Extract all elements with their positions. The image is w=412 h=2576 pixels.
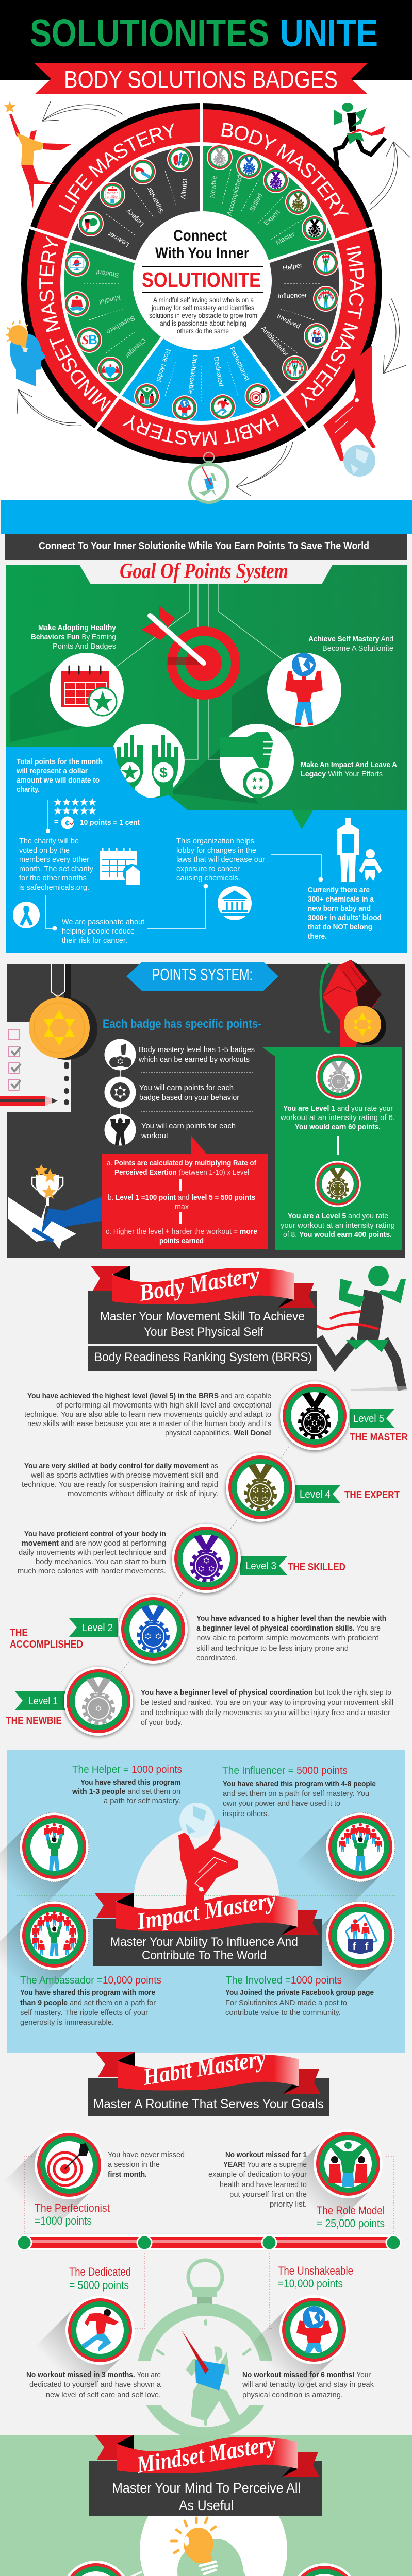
icon: target <box>141 605 240 700</box>
text: role model: example of dedication to your <box>208 2171 307 2179</box>
icon: head and lightbulb <box>140 2477 287 2576</box>
wheel badge labels: Learner <box>106 230 130 249</box>
wheel badge labels: Mindful <box>98 294 121 307</box>
wheel badge labels <box>95 174 307 394</box>
text: total points: amount we will donate to <box>17 776 100 785</box>
arrow: impact to habit <box>383 298 406 374</box>
level 3: movement and are now good at performing <box>22 1539 166 1548</box>
badge: influencer <box>295 1812 395 1912</box>
wheel centre: Connect <box>173 227 227 244</box>
callout: points calculation: Perceived Exertion (between 1-10) x Level <box>114 1168 249 1177</box>
text: dedicated <box>69 2265 131 2292</box>
top white backdrop <box>0 80 412 500</box>
heading: body mastery: Body Readiness Ranking System (BRRS) <box>94 1350 312 1364</box>
text: charity voting: voted on by the <box>19 846 70 855</box>
panel: level examples: You would earn 60 points. <box>295 1123 381 1131</box>
callout: points calculation: c. Higher the level + harder the workout = more <box>106 1227 257 1236</box>
level 4 <box>22 1453 400 1523</box>
level 3 <box>18 1524 345 1595</box>
wheel badge labels: Newbie <box>208 175 218 198</box>
text: influencer <box>222 1765 376 1818</box>
sector: mindset <box>64 241 202 395</box>
panel tab heading: Goal Of Points System <box>120 560 288 583</box>
text: chemicals: 3000+ in adults' blood <box>308 913 382 922</box>
text: perfectionist: The Perfectionist <box>35 2201 110 2214</box>
text: unshakeable body <box>242 2371 374 2399</box>
icon: fist with medal <box>321 960 386 1047</box>
icon: hands star and dollar: $ <box>159 765 168 781</box>
wheel centre <box>133 211 272 350</box>
text: goal 1: Points And Badges <box>53 642 116 651</box>
icon: star reaching figure <box>4 101 71 209</box>
wheel badge labels: Perfectionist <box>228 346 252 382</box>
callout: points calculation: max <box>175 1202 189 1211</box>
text: unshakeable body: will and tenacity to get and stay in peak <box>242 2381 374 2389</box>
text: role model: = 25,000 points <box>317 2217 385 2230</box>
band: tagline <box>5 534 407 560</box>
text: organization: exposure to cancer <box>176 865 240 873</box>
text: total points: charity. <box>17 785 40 794</box>
badge: perfectionist <box>4 2130 104 2230</box>
wheel centre: A mindful self loving soul who is on a <box>153 296 254 304</box>
heading: habit mastery: Habit Mastery <box>141 2045 268 2090</box>
text: passionate: their risk for cancer. <box>62 936 127 945</box>
item: points per badge: badge based on your behavior <box>139 1093 239 1102</box>
heading hexagon <box>126 962 278 991</box>
text: goal 1: Make Adopting Healthy <box>38 623 117 632</box>
icon: gold medal <box>29 964 97 1060</box>
text: ambassador: than 9 people and set them on a path for <box>20 1999 156 2007</box>
band: blue <box>1 500 412 534</box>
text: dedicated body: No workout missed in 3 months. You are <box>26 2371 161 2379</box>
text: involved: The Involved =1000 points <box>226 1975 342 1986</box>
badge: role model <box>283 2129 383 2229</box>
text: role model <box>208 2151 385 2230</box>
wheel badge labels: Helper <box>282 261 303 272</box>
level 1: THE NEWBIE <box>6 1715 62 1726</box>
item: points per badge: You will earn points for each <box>139 1083 234 1092</box>
wheel centre: With You Inner <box>155 245 249 262</box>
heading: mindset mastery: As Useful <box>179 2498 234 2513</box>
text: goal 3: Make An Impact And Leave A <box>301 760 397 769</box>
text: dedicated body: dedicated to yourself and have shown a <box>29 2381 161 2389</box>
icon: big runner <box>305 1266 407 1391</box>
level 3: daily movements with perfect technique and <box>19 1549 166 1557</box>
text: dedicated: = 5000 points <box>69 2279 129 2292</box>
level 2: ACCOMPLISHED <box>10 1639 83 1650</box>
header band <box>0 0 412 80</box>
arrow: life to body <box>42 101 123 121</box>
badge: changer <box>30 2561 130 2576</box>
icon: large stopwatch <box>129 2260 284 2433</box>
item: body mastery badges: which can be earned by workouts <box>138 1055 250 1064</box>
level 2: THE <box>10 1627 28 1638</box>
wheel badge labels: Skilled <box>248 192 264 213</box>
text: involved <box>225 1975 374 2017</box>
icon: stopwatch <box>190 452 228 502</box>
text: charity voting <box>19 837 93 892</box>
arrow: mindset to life <box>17 389 81 426</box>
panel: level examples: You are a Level 5 and you rate <box>288 1212 388 1221</box>
heading: impact mastery <box>93 1887 322 1966</box>
arrow: habit to mindset <box>236 442 293 496</box>
level 2: Level 2 <box>82 1622 113 1634</box>
heading: body mastery: Your Best Physical Self <box>144 1325 263 1339</box>
text: organization: laws that will decrease our <box>176 855 265 864</box>
badge: helper <box>0 1812 89 1912</box>
item: body mastery badges: Body mastery level has 1-5 badges <box>139 1045 255 1054</box>
wheel badge labels: Influencer <box>277 291 307 300</box>
text: involved: You Joined the private Facebook group page <box>225 1989 374 1997</box>
callout: points calculation: b. Level 1 =100 point and level 5 = 500 points <box>108 1193 255 1202</box>
panel: level examples: workout at an intensity rating of 6. <box>280 1113 395 1122</box>
wheel centre: others do the same <box>177 327 229 335</box>
panel: impact mastery <box>0 1750 405 2053</box>
level 2: a beginner level of physical coordination skills. You are <box>196 1624 381 1633</box>
level 2: skill and technique to be less injury prone and <box>196 1645 349 1653</box>
level 2: You have advanced to a higher level than the newbie with <box>196 1615 386 1623</box>
level 3: much more calories with harder movements. <box>18 1567 166 1575</box>
wheel centre: solutions in every obstacle to grow from <box>149 312 257 319</box>
text: role model: priority list. <box>270 2200 307 2209</box>
icon: globe circle backdrop <box>134 1826 279 1966</box>
icon: notepad with checks <box>0 1022 71 1112</box>
wheel centre: journey for self mastery and identifies <box>151 304 254 312</box>
text: passionate: helping people reduce <box>62 927 135 936</box>
long shadows <box>10 665 330 804</box>
level 1: Level 1 <box>28 1696 58 1707</box>
text: perfectionist <box>35 2151 185 2227</box>
icon: hand dangling medal <box>220 724 294 798</box>
points to cents <box>54 816 140 829</box>
level 3: body mechanics. You can start to burn <box>36 1558 166 1566</box>
heading: mindset mastery <box>89 2430 322 2516</box>
text: total points <box>16 757 103 794</box>
ribbon <box>91 1266 316 1308</box>
icon: stars <box>54 798 96 815</box>
wheel badge labels: Dedicated <box>212 356 225 387</box>
text: helper: with 1-3 people and set them on <box>72 1788 180 1796</box>
text: charity voting: month. The set charity <box>19 865 93 873</box>
points to cents: 10 points = 1 cent <box>80 818 140 827</box>
heading: mindset mastery: Mindset Mastery <box>135 2430 278 2478</box>
text: passionate <box>62 918 145 945</box>
item: points per workout: You will earn points for each <box>141 1122 236 1130</box>
icon: handshake and trophy <box>8 1164 102 1249</box>
heading: body mastery: Master Your Movement Skill To Achieve <box>100 1310 305 1324</box>
icon: hands star and dollar <box>110 724 185 798</box>
ring labels <box>39 123 364 446</box>
level 4: well as sports activities with precise movement skill and <box>30 1471 218 1480</box>
wheel badge labels: Ambassador <box>259 325 291 358</box>
level 5: Level 5 <box>353 1413 384 1425</box>
text: chemicals: new born baby and <box>308 904 371 913</box>
text: ambassador: You have shared this program with more <box>20 1989 155 1997</box>
level 4: technique. You are ready for suspension training and rapid <box>22 1481 218 1489</box>
level 1: You have a beginner level of physical coordination but took the right step to <box>141 1689 391 1697</box>
wheel badge labels: Accomplished <box>225 174 243 216</box>
icon: stopwatch runner <box>182 2330 242 2424</box>
text: influencer: You have shared this program with 4-8 people <box>223 1780 376 1788</box>
sector: habit <box>121 283 283 421</box>
heading: impact mastery: Contribute To The World <box>142 1948 267 1962</box>
sector: impact <box>202 241 339 395</box>
heading: habit mastery: Master A Routine That Serves Your Goals <box>93 2097 324 2111</box>
level 4: Level 4 <box>300 1489 331 1500</box>
level 5: technique. You are also able to learn new movements quickly and adapt to <box>24 1411 271 1419</box>
text: involved: contribute value to the community. <box>225 2009 341 2017</box>
item: points per workout <box>104 1114 236 1146</box>
wheel badge labels: Student <box>95 268 120 279</box>
icon: adult and baby <box>337 818 382 882</box>
item: points per workout: workout <box>141 1131 169 1140</box>
points to cents: = <box>54 818 59 826</box>
mastery wheel <box>21 103 382 464</box>
text: dedicated: The Dedicated <box>69 2265 131 2278</box>
level 4: movements without difficulty or risk of injury. <box>68 1490 218 1498</box>
level 2: coordinated. <box>196 1654 238 1663</box>
callout: points calculation <box>102 1136 268 1249</box>
badge ribbon heading: BODY SOLUTIONS BADGES <box>64 66 338 93</box>
text: charity voting: for the other months <box>19 874 87 883</box>
text: dedicated body <box>26 2371 161 2399</box>
icon: lightbulb head <box>6 320 46 386</box>
text: perfectionist: a session in the <box>108 2161 160 2169</box>
wheel badge labels: Altruist <box>179 178 189 199</box>
icon: runner at finish line <box>334 103 385 166</box>
text: goal 3 <box>301 760 397 778</box>
text: goal 2: Achieve Self Mastery And <box>308 635 393 643</box>
wheel centre: SOLUTIONITE <box>142 268 261 292</box>
text: organization: This organization helps <box>176 837 254 845</box>
text: ambassador: The Ambassador =10,000 points <box>20 1975 161 1986</box>
badge: involved <box>295 1901 395 2001</box>
level 2: now able to perform simple movements with proficient <box>196 1634 378 1642</box>
ring labels: IMPACT MASTERY <box>301 246 364 408</box>
heading: mindset mastery: Master Your Mind To Perceive All <box>112 2480 301 2496</box>
level 5: physical capabilities. Well Done! <box>165 1429 271 1437</box>
text: perfectionist: You have never missed <box>108 2151 185 2159</box>
text: goal 1: Behaviors Fun By Earning <box>31 633 116 641</box>
text: role model: No workout missed for 1 <box>225 2151 307 2159</box>
text: influencer: inspire others. <box>223 1810 269 1818</box>
panel: level examples: You are Level 1 and you rate your <box>283 1104 393 1113</box>
text: perfectionist: =1000 points <box>35 2214 92 2227</box>
level 4: You are very skilled at body control for daily movement as <box>24 1462 218 1470</box>
text: chemicals <box>308 886 382 941</box>
text: influencer: and set them on a path for self mastery. You <box>223 1790 369 1798</box>
text: organization: lobby for changes in the <box>176 846 256 855</box>
icon: hand with globe <box>178 1803 238 1917</box>
points to cents: ¢ <box>65 819 70 828</box>
text: role model: YEAR! You are a supreme <box>223 2161 307 2169</box>
icon: hand holding globe <box>323 345 376 477</box>
wheel badge labels: Unshakeable <box>187 354 200 394</box>
level 3: You have proficient control of your body in <box>24 1530 166 1538</box>
arrow: body to impact <box>369 142 410 210</box>
icon: hand dangling medal: ★★ <box>251 775 265 784</box>
level 5 <box>24 1381 408 1452</box>
wheel badge labels: Master <box>274 230 296 246</box>
text: unshakeable <box>278 2264 353 2290</box>
panel: charity <box>6 747 407 953</box>
panel: points system <box>0 960 405 1258</box>
text: goal 1 <box>31 623 117 651</box>
text: charity voting: is safechemicals.org. <box>19 883 89 892</box>
text: chemicals: that do NOT belong <box>308 923 372 931</box>
icon: hand dangling medal: ★★ <box>251 783 265 791</box>
wheel badge labels: Legacy <box>124 208 145 228</box>
text: charity voting: members every other <box>19 855 89 864</box>
level 1: and technique with daily movements so you will be injury free and a master <box>141 1709 390 1717</box>
heading: impact mastery: Master Your Ability To Influence And <box>110 1935 298 1949</box>
level 3: THE SKILLED <box>288 1562 345 1573</box>
text: unshakeable body: physical condition is amazing. <box>242 2391 343 2399</box>
badge: dedicated <box>35 2296 135 2396</box>
wheel badges <box>64 144 339 421</box>
icon: hero lifting world <box>267 653 341 727</box>
panel: goal of points system <box>6 560 407 810</box>
level 1: be tested and ranked. You are on your way to improving your movement skill <box>141 1699 393 1707</box>
level 1: of your body. <box>141 1719 183 1727</box>
text: unshakeable: =10,000 points <box>278 2277 343 2290</box>
level 5: You have achieved the highest level (level 5) in the BRRS and are capable <box>27 1392 271 1400</box>
level 1 <box>6 1667 393 1737</box>
level 5: new skills with ease because you are a master of the human body and it's <box>27 1420 271 1428</box>
panel: level examples <box>262 1047 402 1250</box>
text: influencer: The Influencer = 5000 points <box>222 1765 348 1776</box>
heading: impact mastery: Impact Mastery <box>135 1887 278 1935</box>
icon: calendar badge <box>50 653 124 727</box>
text: involved: For Solutionites AND made a post to <box>225 1999 347 2007</box>
title: UNITE <box>280 11 378 55</box>
wheel centre: and is passionate about helping <box>160 319 246 327</box>
callout: points calculation: points earned <box>159 1236 204 1245</box>
wheel badge labels: Involved <box>276 312 302 330</box>
level 3: Level 3 <box>245 1561 276 1572</box>
text: unshakeable: The Unshakeable <box>278 2264 353 2277</box>
heading: body mastery <box>88 1261 317 1371</box>
text: helper <box>72 1764 182 1805</box>
text: chemicals: 300+ chemicals in a <box>308 895 374 904</box>
ring labels: LIFE MASTERY <box>59 124 174 213</box>
icon: government building <box>218 886 252 920</box>
badge: student <box>259 2563 359 2576</box>
text: ambassador <box>20 1975 161 2027</box>
text: role model: put yourself first on the <box>229 2191 307 2199</box>
text: goal 3: Legacy With Your Efforts <box>301 770 383 778</box>
wheel badge labels: Role Model <box>155 348 172 383</box>
icon: ribbon circle <box>13 902 40 928</box>
badge: unshakeable <box>249 2295 349 2395</box>
wheel badge labels: Superhero <box>105 314 136 336</box>
wheel badge labels: Superstar <box>145 185 166 215</box>
text: role model: health and have learned to <box>220 2181 307 2189</box>
panel: level examples: of 8. You would earn 400 points. <box>283 1230 392 1239</box>
text: dedicated body: new level of self care and self love. <box>46 2391 161 2399</box>
text: each badge: Each badge has specific points- <box>103 1017 261 1031</box>
text: passionate: We are passionate about <box>62 918 145 926</box>
badge: ambassador <box>0 1901 89 2001</box>
sector: life <box>71 146 202 283</box>
text: organization: causing chemicals. <box>176 874 240 883</box>
band: tagline: Connect To Your Inner Solutionite While You Earn Points To Save The World <box>39 540 369 552</box>
ring labels: BODY MASTERY <box>221 123 349 216</box>
text: helper: You have shared this program <box>80 1778 180 1787</box>
icon: calendar and ballot <box>100 848 141 885</box>
text: role model: The Role Model <box>317 2204 385 2217</box>
title: SOLUTIONITES <box>30 11 269 55</box>
text: goal 2: Become A Solutionite <box>322 644 393 653</box>
text: total points: Total points for the month <box>17 757 103 766</box>
level 5: of performing all movements with high skill level and exceptional <box>56 1401 271 1410</box>
text: total points: will represent a dollar <box>16 767 88 775</box>
text: chemicals: Currently there are <box>308 886 370 894</box>
text: charity voting: The charity will be <box>19 837 79 845</box>
item: points per badge <box>104 1077 239 1108</box>
text: helper: a path for self mastery. <box>104 1797 180 1805</box>
panel: level examples: your workout at an intensity rating <box>281 1221 395 1230</box>
heading hexagon: POINTS SYSTEM: <box>152 965 253 984</box>
wheel badge labels: Expert <box>262 208 282 227</box>
level 4: THE EXPERT <box>344 1489 400 1501</box>
text: unshakeable body: No workout missed for 6 months! Your <box>242 2371 371 2379</box>
wheel badge labels: Changer <box>124 337 147 360</box>
heading: body mastery: Body Mastery <box>137 1261 261 1306</box>
timeline bar <box>17 2234 401 2251</box>
callout: points calculation: a. Points are calculated by multiplying Rate of <box>107 1159 257 1167</box>
text: ambassador: generosity is immeasurable. <box>20 2019 114 2027</box>
sector: body <box>202 146 333 283</box>
heading: habit mastery <box>88 2045 329 2116</box>
text: chemicals: there. <box>308 932 327 941</box>
ring labels: HABIT MASTERY <box>122 413 279 446</box>
item: body mastery badges <box>104 1039 255 1071</box>
text: organization <box>176 837 265 883</box>
level 2 <box>10 1595 386 1665</box>
text: influencer: own your power and have used it to <box>223 1800 340 1808</box>
text: perfectionist: first month. <box>108 2171 147 2179</box>
ring labels: MINDSET MASTERY <box>39 236 111 412</box>
text: ambassador: self mastery. The ripple effects of your <box>20 2009 148 2017</box>
text: goal 2 <box>308 635 393 653</box>
text: helper: The Helper = 1000 points <box>72 1764 182 1775</box>
panel: mindset mastery <box>0 2430 412 2576</box>
